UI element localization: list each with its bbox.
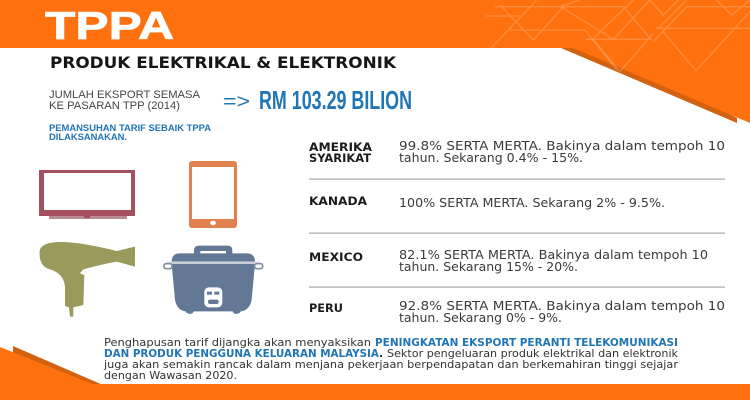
row: Mexico: MEXICO: [309, 250, 363, 264]
icon: tablet: [189, 161, 237, 228]
row: Mexico: 82.1% SERTA MERTA. Bakinya dalam tempoh 10: [399, 248, 708, 262]
row: Kanada: 100% SERTA MERTA. Sekarang 2% - 9.5%.: [399, 196, 665, 210]
export value: RM 103.29 BILION: [259, 85, 412, 115]
footer paragraph: DAN PRODUK PENGGUNA KELUARAN MALAYSIA.: [104, 347, 383, 360]
export label: JUMLAH EKSPORT SEMASA: [49, 89, 201, 101]
footer paragraph: juga akan semakin rancak dalam menjana pekerjaan berpendapatan dan berkemahiran tinggi sejajar: [103, 358, 678, 371]
footer paragraph: dengan Wawasan 2020.: [104, 369, 237, 382]
heading: PRODUK ELEKTRIKAL & ELEKTRONIK: [50, 53, 397, 72]
header banner: [0, 0, 750, 123]
row: Amerika Syarikat: AMERIKA: [309, 140, 372, 154]
row: Kanada: KANADA: [309, 194, 367, 208]
row: Peru: PERU: [309, 301, 343, 315]
icon: television: [39, 170, 135, 219]
footer paragraph: [103, 336, 679, 382]
icon: hair dryer: [40, 242, 135, 317]
row: Mexico: [309, 248, 708, 274]
tariff subheading: PEMANSUHAN TARIF SEBAIK TPPA: [49, 123, 212, 133]
row: Peru: tahun. Sekarang 0% - 9%.: [399, 311, 562, 325]
footer banner: [0, 346, 750, 400]
tariff subheading: [49, 123, 212, 142]
export value: =>: [223, 91, 250, 113]
row: Kanada: [309, 194, 665, 210]
export label: KE PASARAN TPP (2014): [49, 100, 180, 112]
row: Mexico: tahun. Sekarang 15% - 20%.: [399, 260, 578, 274]
row: Amerika Syarikat: 99.8% SERTA MERTA. Bakinya dalam tempoh 10: [399, 139, 725, 153]
row: Amerika Syarikat: tahun. Sekarang 0.4% - 15%.: [399, 151, 583, 165]
title: TPPA: [45, 5, 174, 48]
row: Peru: 92.8% SERTA MERTA. Bakinya dalam tempoh 10: [399, 299, 725, 313]
footer paragraph: PENINGKATAN EKSPORT PERANTI TELEKOMUNIKASI: [375, 336, 678, 349]
export label: [49, 89, 201, 112]
footer paragraph: Penghapusan tarif dijangka akan menyaksikan: [104, 336, 371, 349]
export value: [223, 85, 412, 115]
row: Amerika Syarikat: SYARIKAT: [309, 151, 371, 165]
icon: rice cooker: [164, 246, 263, 314]
row: Amerika Syarikat: [309, 139, 725, 165]
row: Peru: [309, 299, 725, 325]
footer paragraph: Sektor pengeluaran produk elektrikal dan elektronik: [387, 347, 679, 360]
tariff subheading: DILAKSANAKAN.: [49, 132, 127, 142]
